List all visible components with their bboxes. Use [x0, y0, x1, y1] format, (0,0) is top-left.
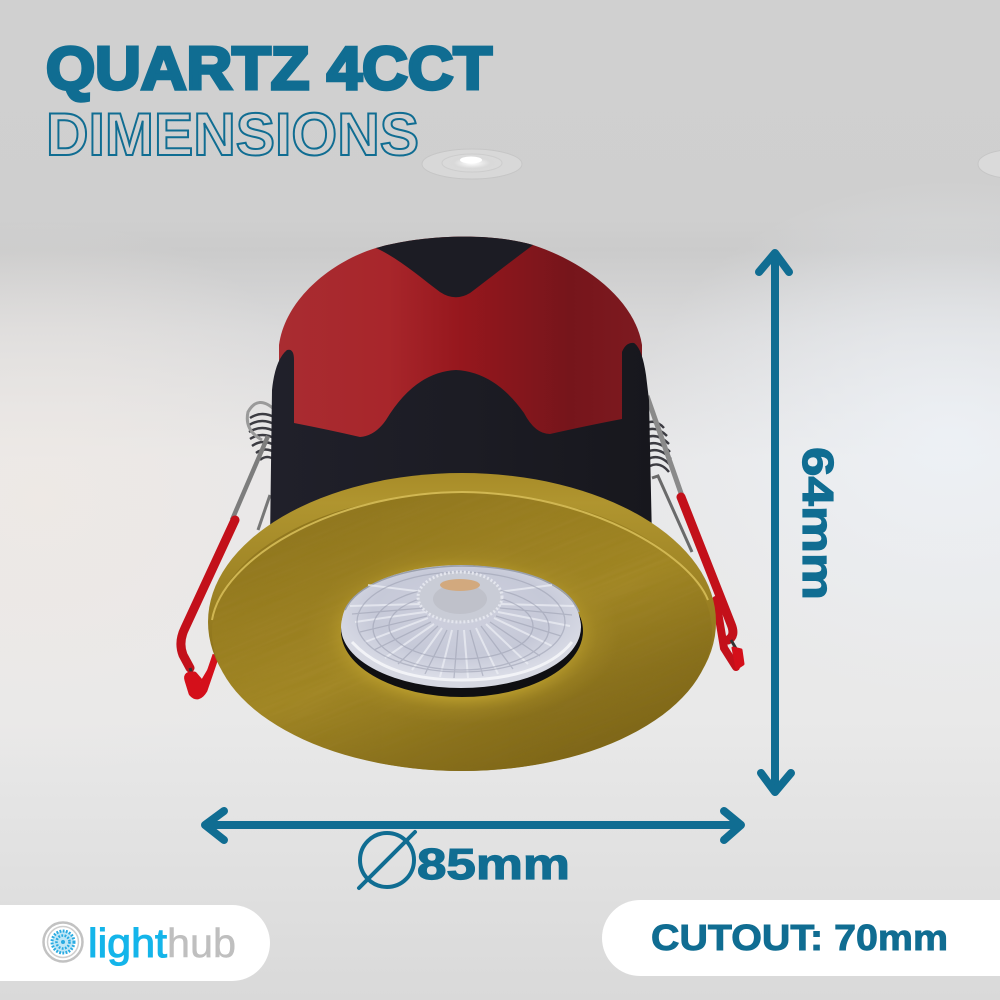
icon: diameter symbol: [359, 832, 415, 888]
lens: LED dome: [418, 572, 502, 622]
dimension arrow: height: [759, 253, 791, 792]
ceiling downlight left: [422, 149, 522, 179]
flange: brushed face: [211, 491, 709, 771]
dimension arrow: width: [205, 811, 741, 840]
title: QUARTZ 4CCT: [46, 35, 492, 102]
label: diameter 85mm: [359, 832, 570, 889]
product: downlight: [176, 236, 744, 771]
lens: [341, 565, 581, 688]
subtitle: DIMENSIONS: [46, 101, 419, 168]
flange: bezel hole: [341, 565, 583, 697]
label: 64mm: 64mm: [793, 447, 842, 600]
cutout pill: CUTOUT: 70mm: [651, 917, 948, 958]
logo pill: lighthub: light: [88, 920, 168, 966]
logo pill: lighthub: hub: [167, 920, 236, 966]
left spring and clip: [181, 402, 276, 696]
logo pill: lighthub: [0, 905, 270, 981]
flange: outer rim: [208, 473, 716, 771]
body: black lower sleeve: [270, 343, 652, 540]
cutout pill: [602, 900, 1000, 976]
title: [46, 35, 492, 168]
ceiling downlight right: [978, 150, 1000, 178]
label: diameter 85mm: 85mm: [417, 840, 570, 889]
right spring and clip: [645, 396, 743, 668]
body: black top notch: [376, 237, 533, 297]
icon: lighthub rings: [44, 922, 82, 962]
body: red cap: [279, 237, 642, 450]
